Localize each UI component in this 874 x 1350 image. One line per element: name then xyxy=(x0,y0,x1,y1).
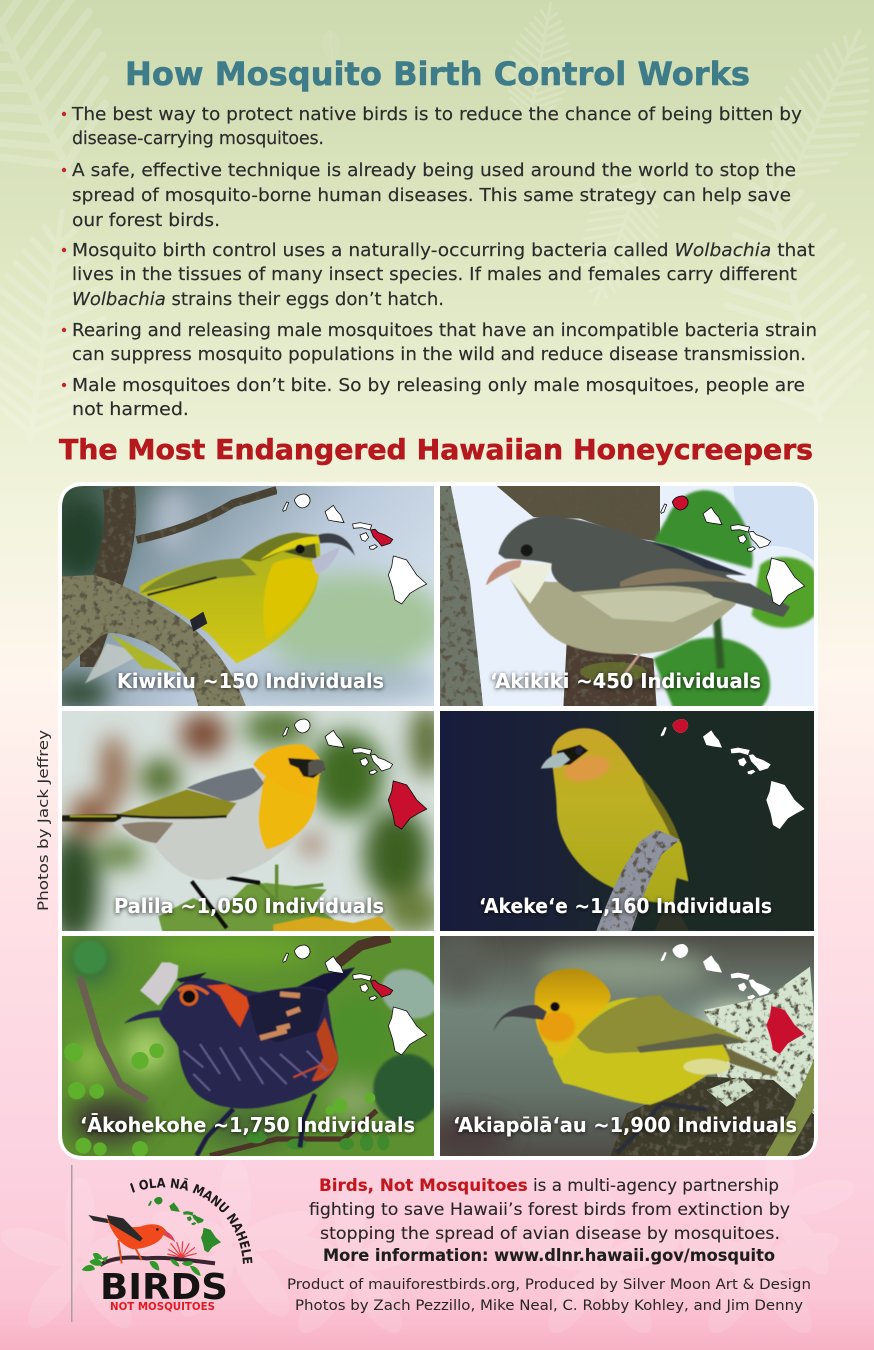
photo credit: Photos by Jack Jeffrey xyxy=(36,730,52,911)
bullet 3: lives in the tissues of many insect species. If males and females carry different xyxy=(72,265,797,285)
branch in front xyxy=(62,575,246,707)
logo leaves xyxy=(82,1253,201,1276)
label: Palila ~1,050 Individuals xyxy=(114,894,384,918)
branches xyxy=(80,487,277,667)
panel: Akohekohe xyxy=(60,934,447,1164)
bird: Akikiki xyxy=(486,515,790,674)
panel: photo grid xyxy=(47,480,820,1164)
logo: Birds Not Mosquitoes xyxy=(82,1178,252,1313)
bullet 4: can suppress mosquito populations in the wild and reduce disease transmission. xyxy=(72,345,806,365)
bullet 1: disease-carrying mosquitoes. xyxy=(72,129,324,149)
logo wordmark: BIRDS xyxy=(100,1267,228,1308)
bullet 4: Rearing and releasing male mosquitoes that have an incompatible bacteria strain xyxy=(72,321,817,341)
leaves xyxy=(73,941,447,1124)
branches xyxy=(337,937,390,964)
bullet 4 xyxy=(62,321,817,365)
logo lehua flower xyxy=(167,1241,197,1257)
map: Kauai highlighted xyxy=(661,496,805,606)
logo branch xyxy=(100,1257,215,1265)
credits: Product of mauiforestbirds.org, Produced by Silver Moon Art & Design xyxy=(287,1277,811,1293)
logo arc text xyxy=(132,1187,243,1276)
bird: Palila xyxy=(62,744,325,928)
branch xyxy=(595,830,680,935)
label: Kiwikiu ~150 Individuals xyxy=(117,669,384,693)
lichen xyxy=(704,966,814,1114)
map: Kauai highlighted xyxy=(661,719,805,829)
label: ‘Akikiki ~450 Individuals xyxy=(490,669,761,693)
partnership description: fighting to save Hawaii’s forest birds from extinction by xyxy=(309,1200,790,1219)
map: Maui highlighted xyxy=(283,494,427,604)
partnership description xyxy=(309,1176,790,1265)
logo map xyxy=(148,1197,220,1252)
logo subtext: NOT MOSQUITOES xyxy=(110,1301,215,1313)
bird: Akiapolaau xyxy=(493,969,778,1153)
partnership description: Birds, Not Mosquitoes is a multi-agency partnership xyxy=(319,1176,779,1195)
label: ‘Akiapōlā‘au ~1,900 Individuals xyxy=(453,1113,797,1137)
bullet 2: spread of mosquito-borne human diseases. This same strategy can help save xyxy=(72,186,791,206)
bullet 2: A safe, effective technique is already being used around the world to stop the xyxy=(72,161,796,181)
logo bird xyxy=(88,1215,175,1263)
heading: endangered honeycreepers: The Most Endangered Hawaiian Honeycreepers xyxy=(59,433,813,466)
bird: Kiwikiu xyxy=(85,533,355,683)
bullet list: how it works xyxy=(62,105,817,420)
bird: Akekee xyxy=(541,728,691,935)
credits xyxy=(287,1277,811,1314)
bullet 1 xyxy=(62,105,802,149)
title: How Mosquito Birth Control Works xyxy=(125,55,750,93)
label: ‘Ākohekohe ~1,750 Individuals xyxy=(80,1113,415,1137)
bullet 2: our forest birds. xyxy=(72,211,220,231)
bullet 3: Mosquito birth control uses a naturally-occurring bacteria called Wolbachia that xyxy=(72,241,815,261)
bird: Akohekohe xyxy=(124,962,355,1156)
bullet 3: Wolbachia strains their eggs don’t hatch. xyxy=(72,290,444,310)
logo: Birds Not Mosquitoes: I OLA NĀ MANU NAHELE xyxy=(130,1178,252,1264)
partnership description: stopping the spread of avian disease by mosquitoes. xyxy=(320,1224,780,1243)
bullet 5: not harmed. xyxy=(72,400,189,420)
bullet 2 xyxy=(62,161,796,231)
panel: Akikiki xyxy=(440,482,820,712)
map: Big Island highlighted xyxy=(283,719,427,829)
partnership description: More information: www.dlnr.hawaii.gov/mosquito xyxy=(323,1246,775,1265)
logo artwork xyxy=(82,1197,220,1276)
bullet 5: Male mosquitoes don’t bite. So by releasing only male mosquitoes, people are xyxy=(72,376,805,396)
bullet 5 xyxy=(62,376,805,420)
map: Big Island highlighted xyxy=(661,944,805,1054)
berries xyxy=(64,1043,375,1157)
panel: Kiwikiu xyxy=(62,486,434,706)
panel: Akiapolaau xyxy=(423,930,820,1160)
credits: Photos by Zach Pezzillo, Mike Neal, C. Robby Kohley, and Jim Denny xyxy=(295,1298,803,1314)
panel: Palila xyxy=(62,711,434,931)
panel: Akekee xyxy=(440,708,820,938)
bullet 1: The best way to protect native birds is to reduce the chance of being bitten by xyxy=(71,105,802,125)
map: Maui highlighted xyxy=(283,945,427,1055)
foliage xyxy=(158,865,395,935)
label: ‘Akeke‘e ~1,160 Individuals xyxy=(479,894,772,918)
bullet 3 xyxy=(62,241,815,310)
